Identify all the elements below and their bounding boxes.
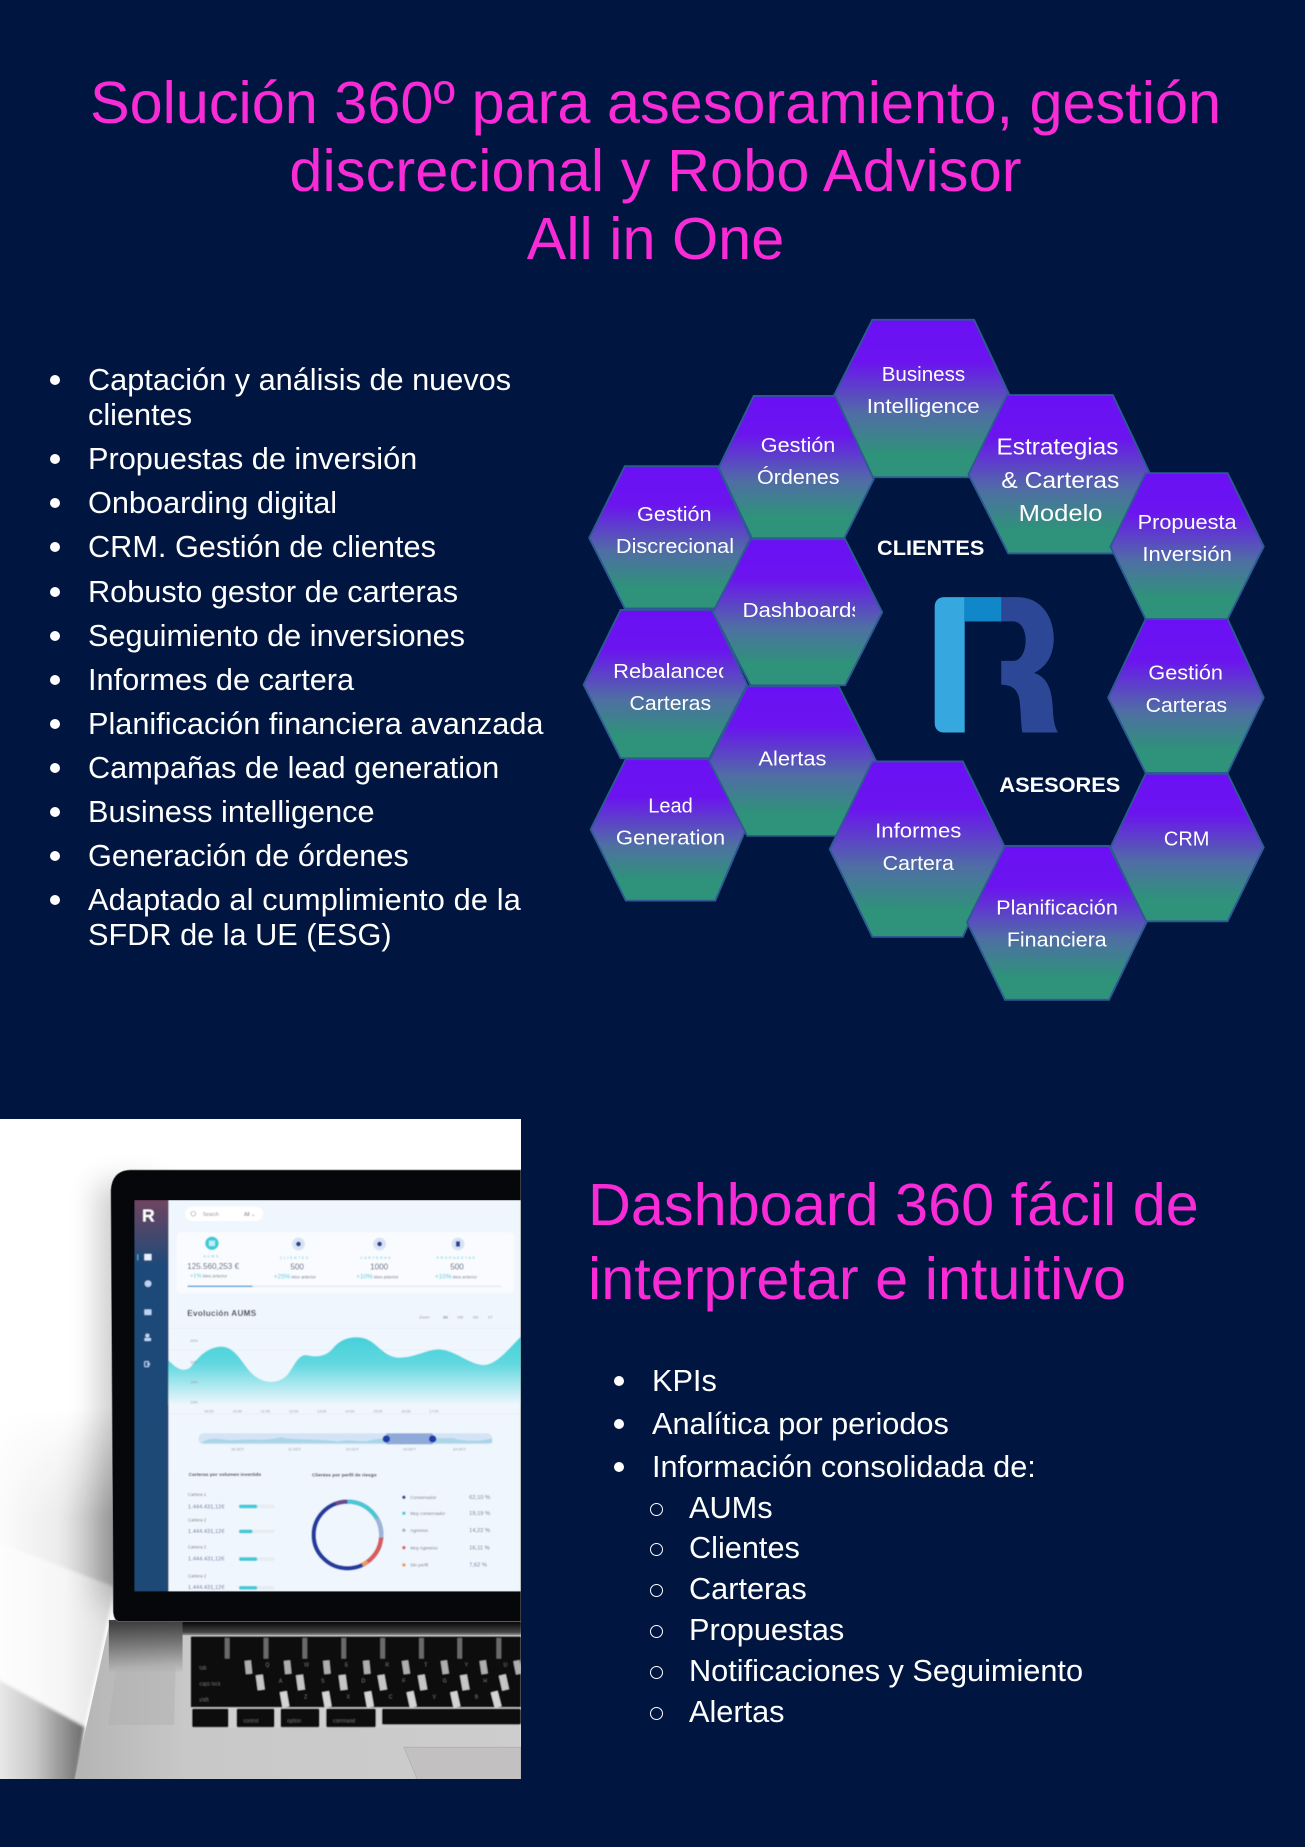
keyboard: G xyxy=(443,1679,447,1685)
KPI card: CLIENTES xyxy=(280,1256,310,1260)
portfolios by volume: Cartera 2 xyxy=(188,1545,207,1550)
hexagon: Rebalanceo Carteras: Rebalanceo xyxy=(613,660,730,683)
dashboard feature list: AUMs xyxy=(689,1490,773,1525)
desk surfaces xyxy=(0,1350,122,1793)
title xyxy=(90,69,1221,272)
hexagon: Estrategias y Carteras Modelo xyxy=(968,395,1150,553)
hexagon: Business Intelligence: Intelligence xyxy=(867,395,980,418)
hexagon: Lead Generation xyxy=(591,759,746,901)
keyboard: S xyxy=(321,1679,325,1685)
hexagon: Dashboards: Dashboards xyxy=(742,599,863,622)
keyboard: control xyxy=(243,1719,259,1725)
dashboard heading: interpretar e intuitivo xyxy=(588,1245,1126,1312)
feature list xyxy=(50,362,544,952)
feature list: Seguimiento de inversiones xyxy=(88,618,465,653)
keyboard: tab xyxy=(199,1665,207,1671)
feature list: Captación y análisis de nuevos xyxy=(88,362,511,397)
donut legend xyxy=(402,1495,490,1569)
hexagon: Gestión Órdenes: Gestión xyxy=(761,434,835,457)
keyboard: caps lock xyxy=(199,1681,221,1687)
portfolios by volume: 1.444.431,12€ xyxy=(188,1504,225,1510)
dashboard heading xyxy=(588,1171,1199,1312)
keyboard: V xyxy=(433,1695,437,1701)
portfolios by volume: Cartera 2 xyxy=(188,1517,207,1522)
donut legend: 19,19 % xyxy=(469,1511,490,1517)
keyboard: option xyxy=(287,1719,301,1725)
keyboard: H xyxy=(483,1679,487,1685)
area chart: Evolución AUMS: Zoom xyxy=(419,1314,430,1319)
label: ASESORES: ASESORES xyxy=(999,773,1120,797)
donut legend: 7,62 % xyxy=(469,1563,487,1569)
donut chart: client risk profile xyxy=(312,1473,381,1568)
area chart: Evolución AUMS: 40% xyxy=(190,1339,198,1343)
KPI card: 125.560,253 € xyxy=(187,1262,240,1271)
keyboard: Q xyxy=(265,1663,269,1669)
KPI card: PROPUESTAS xyxy=(437,1256,476,1260)
hexagon: Gestión Discrecional xyxy=(589,466,750,609)
area chart: Evolución AUMS: 13:00 xyxy=(317,1409,326,1413)
hexagon: Gestión Carteras: Gestión xyxy=(1148,662,1223,685)
laptop base xyxy=(74,1620,521,1780)
KPI card: CARTERAS xyxy=(360,1256,392,1260)
feature list: Generación de órdenes xyxy=(88,838,409,873)
trackpad xyxy=(404,1747,521,1780)
laptop dashboard photo xyxy=(0,1119,521,1779)
hexagon: Business Intelligence xyxy=(834,320,1010,477)
keyboard: D xyxy=(362,1679,366,1685)
keyboard: R xyxy=(385,1663,389,1669)
area chart: Evolución AUMS: 1W xyxy=(457,1314,463,1319)
keyboard: A xyxy=(279,1679,283,1685)
hexagon: Gestión Carteras xyxy=(1108,619,1264,773)
donut legend: Sin perfil xyxy=(410,1563,428,1568)
hexagon: Propuesta Inversión xyxy=(1110,473,1264,619)
search box: Search xyxy=(203,1212,219,1218)
portfolios by volume: Cartera 2 xyxy=(188,1573,207,1578)
dashboard feature list: Propuestas xyxy=(689,1612,844,1647)
logo: R xyxy=(935,597,1058,733)
portfolios by volume: Cartera 1 xyxy=(188,1492,207,1497)
hexagon: Dashboards xyxy=(713,539,882,685)
donut legend: 14,22 % xyxy=(469,1528,490,1534)
KPI card: AUMS xyxy=(203,1254,220,1258)
KPI card: +25% Mes anterior xyxy=(274,1274,317,1281)
area chart: Evolución AUMS: 1M xyxy=(473,1314,479,1319)
feature list: Onboarding digital xyxy=(88,485,337,520)
search box: All ⌄ xyxy=(244,1212,255,1218)
area chart: Evolución AUMS: 10% xyxy=(190,1400,198,1404)
hexagon: Propuesta Inversión: Inversión xyxy=(1142,543,1232,566)
hexagon: Rebalanceo Carteras: Carteras xyxy=(630,692,711,715)
dashboard feature list: Alertas xyxy=(689,1694,785,1729)
range slider: 14 OCT xyxy=(453,1448,467,1452)
KPI card: 500 xyxy=(290,1263,304,1272)
dashboard feature list: Notificaciones y Seguimiento xyxy=(689,1653,1083,1688)
feature list: Propuestas de inversión xyxy=(88,441,417,476)
dashboard feature list xyxy=(614,1363,1083,1729)
KPI card: +10% Mes anterior xyxy=(435,1273,478,1280)
keyboard: command xyxy=(333,1719,355,1725)
title: Solución 360º para asesoramiento, gestión xyxy=(90,69,1221,136)
keyboard: W xyxy=(304,1663,309,1669)
label: CLIENTES: CLIENTES xyxy=(877,536,984,560)
hexagon: Lead Generation: Lead xyxy=(648,795,693,817)
hexagon: Informes Cartera: Informes xyxy=(875,820,961,843)
hexagon: Gestión Órdenes: Órdenes xyxy=(757,466,840,489)
dashboard feature list: KPIs xyxy=(652,1363,717,1398)
KPI card xyxy=(177,1232,514,1293)
range slider xyxy=(198,1433,492,1452)
feature list: Planificación financiera avanzada xyxy=(88,706,544,741)
hexagon: Estrategias y Carteras Modelo: Estrategias xyxy=(997,434,1118,460)
laptop screen xyxy=(134,1200,521,1592)
hexagon: Alertas: Alertas xyxy=(758,748,826,771)
feature list: SFDR de la UE (ESG) xyxy=(88,917,392,952)
portfolios by volume: 1.444.431,12€ xyxy=(188,1556,225,1562)
hexagon: Alertas xyxy=(709,686,876,836)
keyboard: E xyxy=(345,1663,349,1669)
donut legend: 62,10 % xyxy=(469,1495,490,1501)
dashboard feature list: Información consolidada de: xyxy=(652,1449,1036,1484)
KPI card: 500 xyxy=(450,1262,464,1271)
keyboard xyxy=(191,1637,521,1728)
feature list: Robusto gestor de carteras xyxy=(88,574,458,609)
hexagon: Gestión Órdenes xyxy=(719,396,874,538)
keyboard: C xyxy=(389,1695,393,1701)
area chart: Evolución AUMS: 10:00 xyxy=(233,1409,242,1413)
hexagon: Gestión Carteras: Carteras xyxy=(1146,694,1227,717)
keyboard: F xyxy=(402,1679,405,1685)
hexagon: Lead Generation: Generation xyxy=(616,827,725,850)
hexagon: Gestión Discrecional: Gestión xyxy=(637,503,712,526)
hexagon diagram xyxy=(582,318,1265,1001)
hexagon: Propuesta Inversión: Propuesta xyxy=(1138,511,1237,534)
keyboard: Z xyxy=(304,1695,307,1701)
hexagon: Planificación Financiera: Financiera xyxy=(1007,929,1107,951)
area chart: Evolución AUMS: 16:00 xyxy=(401,1409,411,1413)
KPI card: +10% Mes anterior xyxy=(356,1273,399,1280)
dashboard feature list: Analítica por periodos xyxy=(652,1406,949,1441)
dashboard feature list: Carteras xyxy=(689,1571,807,1606)
donut legend: 16,11 % xyxy=(469,1545,490,1551)
donut legend: Conservador xyxy=(410,1495,437,1500)
portfolios by volume: 1.444.431,12€ xyxy=(188,1529,225,1535)
hexagon: Estrategias y Carteras Modelo: Modelo xyxy=(1019,500,1103,526)
area chart: Evolución AUMS: 17:00 xyxy=(429,1409,439,1413)
title: All in One xyxy=(527,205,784,272)
dashboard heading: Dashboard 360 fácil de xyxy=(588,1171,1199,1238)
feature list: CRM. Gestión de clientes xyxy=(88,529,436,564)
laptop bezel xyxy=(111,1170,521,1622)
hexagon: Informes Cartera: Cartera xyxy=(883,852,954,875)
area chart: Evolución AUMS: 20% xyxy=(190,1381,198,1385)
portfolios by volume: 1.444.431,12€ xyxy=(188,1585,225,1591)
donut legend: Muy Agresivo xyxy=(410,1545,438,1550)
keyboard: Y xyxy=(465,1663,469,1669)
range slider: 11 OCT xyxy=(288,1448,302,1452)
area chart: Evolución AUMS: Evolución AUMS xyxy=(187,1309,257,1318)
hexagon: Estrategias y Carteras Modelo: & Carteras xyxy=(1001,467,1119,493)
feature list: Business intelligence xyxy=(88,794,375,829)
portfolios by volume xyxy=(188,1472,274,1591)
area chart: Evolución AUMS: 30% xyxy=(190,1361,198,1365)
hexagon: CRM xyxy=(1110,774,1264,921)
donut legend: Muy conservador xyxy=(410,1511,446,1516)
feature list: Adaptado al cumplimiento de la xyxy=(88,882,521,917)
keyboard: B xyxy=(475,1695,479,1701)
sidebar xyxy=(134,1200,168,1592)
keyboard: U xyxy=(504,1663,508,1669)
donut chart: client risk profile: Clientes por perfil de riesgo xyxy=(312,1473,377,1479)
hexagon: CRM: CRM xyxy=(1164,828,1209,850)
area chart: Evolución AUMS: 1Y xyxy=(488,1314,493,1319)
hexagon: Gestión Discrecional: Discrecional xyxy=(616,535,734,558)
feature list: Campañas de lead generation xyxy=(88,750,499,785)
portfolios by volume: Carteras por volumen invertido xyxy=(189,1472,261,1478)
hexagon: Rebalanceo Carteras xyxy=(584,610,747,758)
area chart: Evolución AUMS: 12:00 xyxy=(289,1409,298,1413)
range slider: 10 OCT xyxy=(231,1448,245,1452)
hexagon: Informes Cartera xyxy=(830,761,1005,937)
area chart: Evolución AUMS: 14:00 xyxy=(345,1409,354,1413)
range slider: 12 OCT xyxy=(346,1448,360,1452)
area chart: Evolución AUMS: 09:00 xyxy=(204,1409,214,1413)
title: discrecional y Robo Advisor xyxy=(289,137,1022,204)
keyboard: X xyxy=(346,1695,350,1701)
area chart: Evolución AUMS: 1D xyxy=(443,1314,448,1319)
area chart: Evolución AUMS xyxy=(168,1309,521,1414)
area chart: Evolución AUMS: 15:00 xyxy=(373,1409,382,1413)
hexagon: Planificación Financiera xyxy=(967,846,1147,1000)
sidebar: R xyxy=(142,1205,155,1225)
feature list: clientes xyxy=(88,397,192,432)
hexagon: Planificación Financiera: Planificación xyxy=(996,897,1118,919)
keyboard: T xyxy=(424,1663,427,1669)
range slider: 13 OCT xyxy=(403,1448,417,1452)
hexagon: Business Intelligence: Business xyxy=(882,363,965,386)
dashboard feature list: Clientes xyxy=(689,1530,800,1565)
search box xyxy=(185,1207,263,1221)
area chart: Evolución AUMS: 11:00 xyxy=(261,1409,270,1413)
KPI card: +1% Mes anterior xyxy=(190,1274,228,1280)
keyboard: shift xyxy=(199,1698,209,1704)
feature list: Informes de cartera xyxy=(88,662,354,697)
KPI card: 1000 xyxy=(370,1262,389,1271)
donut legend: Agresivo xyxy=(410,1528,429,1533)
